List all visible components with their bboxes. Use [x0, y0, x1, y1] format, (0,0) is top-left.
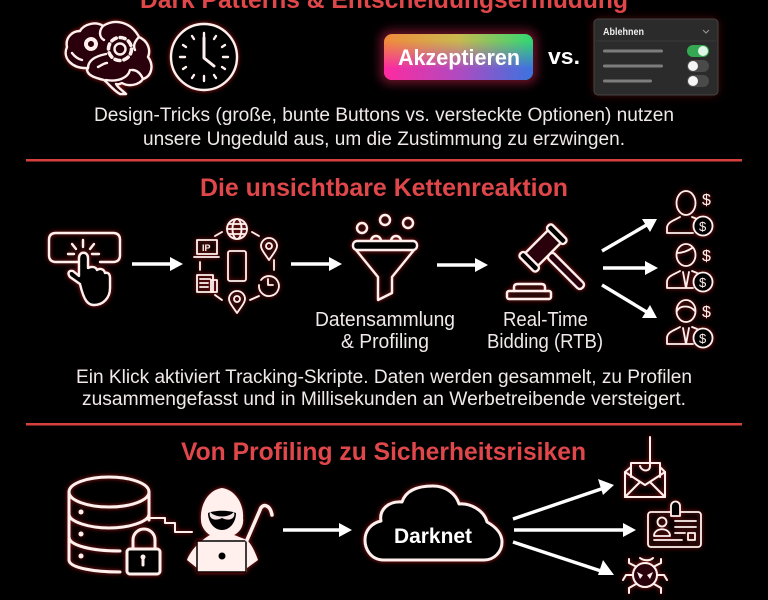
icon: malware bug: [623, 558, 667, 593]
icon: phone: [228, 251, 246, 281]
label: real-time bidding: Real-Time: [503, 309, 588, 331]
arrows to risks: [513, 479, 636, 575]
icon: recent clock: [259, 276, 279, 296]
icon: hacker with laptop: [187, 488, 272, 572]
text: dark patterns description: [94, 105, 674, 150]
icon: advertiser 1: $: [699, 219, 707, 234]
panel: ablehnen settings: [594, 19, 718, 95]
icon: gavel: [507, 223, 599, 304]
arrow: [291, 257, 342, 271]
icon: brain with gears: [66, 22, 151, 94]
icon: advertiser 3: $: [699, 331, 707, 346]
icon: laptop ip: IP: [202, 243, 211, 253]
label: real-time bidding: Bidding (RTB): [487, 331, 603, 353]
icon: phishing email: [625, 437, 665, 497]
arrow: [283, 523, 352, 537]
heading: chain reaction: Die unsichtbare Kettenreaktion: [200, 174, 568, 202]
icon: click hand: [49, 233, 120, 305]
text: chain reaction description: [76, 367, 692, 410]
text: dark patterns description: Design-Tricks (große, bunte Buttons vs. versteckte Optionen) nutzen: [94, 105, 674, 126]
icon: darknet cloud: Darknet: [394, 525, 472, 548]
arrows to advertisers: [602, 219, 658, 318]
icon: darknet cloud: [365, 486, 502, 560]
section: security risks: [69, 437, 701, 593]
label: vs: vs.: [548, 44, 580, 69]
panel: ablehnen settings: Ablehnen: [603, 26, 644, 38]
icon: advertiser 2: $: [702, 248, 711, 265]
icon: advertiser 2: $: [699, 275, 707, 290]
icon: location pin right: [261, 238, 277, 260]
label: real-time bidding: [487, 309, 603, 353]
icon: advertiser 1: [667, 191, 712, 236]
icon: devices: [197, 275, 217, 292]
text: dark patterns description: unsere Ungeduld aus, um die Zustimmung zu erzwingen.: [143, 129, 625, 150]
icon: advertiser 2: [667, 244, 712, 292]
label: datensammlung: & Profiling: [341, 331, 429, 353]
icon: identity card: [648, 502, 701, 547]
heading: security risks: Von Profiling zu Sicherheitsrisiken: [181, 438, 586, 466]
icon: database with lock: [69, 477, 192, 574]
icon: funnel: [353, 215, 417, 300]
label: datensammlung: [315, 309, 455, 353]
label: datensammlung: Datensammlung: [315, 309, 455, 331]
arrow: [437, 258, 488, 272]
arrow: [132, 257, 183, 271]
icon: globe: [227, 219, 247, 239]
section: chain reaction: [49, 174, 712, 410]
icon: advertiser 1: $: [702, 192, 711, 209]
button: akzeptieren: Akzeptieren: [398, 45, 520, 70]
text: chain reaction description: Ein Klick aktiviert Tracking-Skripte. Daten werden gesammelt, zu Profilen: [76, 367, 692, 388]
icon: location pin bottom: [229, 291, 245, 313]
text: chain reaction description: zusammengefasst und in Millisekunden an Werbetreibende versteigert.: [82, 389, 686, 410]
icon: clock: [171, 24, 237, 90]
icon: advertiser 3: $: [702, 304, 711, 321]
icon: advertiser 3: [667, 300, 712, 348]
button: akzeptieren: [380, 30, 537, 84]
icon group: data sources: [194, 219, 279, 313]
section: dark patterns: [66, 0, 718, 150]
